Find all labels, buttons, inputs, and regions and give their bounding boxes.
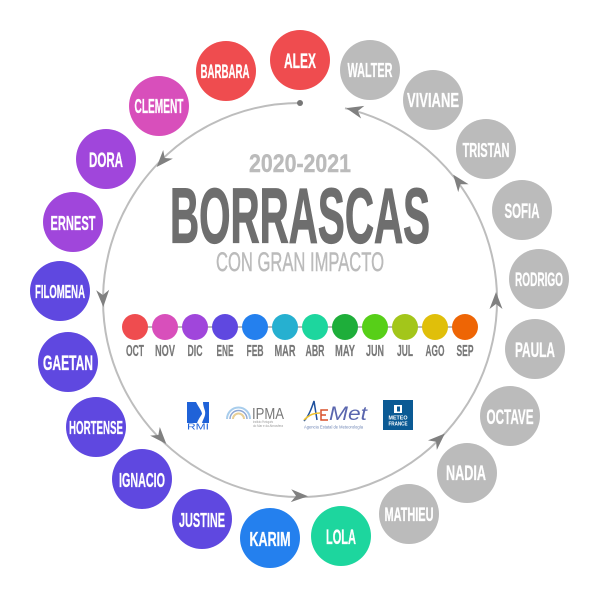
bubble: Rodrigo — [509, 249, 569, 309]
month: March — [272, 314, 298, 360]
bubble: Lola: LOLA — [326, 526, 356, 549]
month: September — [452, 314, 478, 360]
bubble: Alex: ALEX — [284, 50, 316, 73]
bubble: Alex — [270, 30, 330, 90]
bubble: Ignacio — [112, 449, 172, 509]
month: December — [182, 314, 208, 360]
logo: Meteo France: FRANCE — [388, 422, 408, 428]
logo: AEMet — [304, 401, 368, 430]
month: July: JUL — [397, 343, 413, 360]
logo: IPMA: Instituto Português — [253, 420, 273, 424]
bubble: Walter — [340, 40, 400, 100]
title block — [170, 150, 430, 277]
bubble: Walter: WALTER — [348, 60, 393, 82]
bubble: Sofia — [492, 180, 552, 240]
bubble: Gaetan — [38, 332, 98, 392]
ring with arrows — [96, 100, 502, 503]
bubble: Ernest — [43, 192, 103, 252]
logo: RMI — [187, 402, 209, 432]
logos — [187, 400, 413, 432]
month: August: AGO — [426, 343, 444, 360]
month: July — [392, 314, 418, 360]
month: August — [422, 314, 448, 360]
month: October: OCT — [126, 343, 144, 360]
bubble: Justine: JUSTINE — [179, 510, 225, 532]
bubble: Nadia — [437, 443, 497, 503]
bubble: Justine — [172, 489, 232, 549]
bubble: Barbara: BARBARA — [200, 62, 250, 83]
month: April — [302, 314, 328, 360]
bubble: Barbara — [196, 41, 256, 101]
month: February — [242, 314, 268, 360]
bubble: Hortense — [66, 397, 126, 457]
bubble: Dora: DORA — [89, 149, 123, 172]
bubble: Octave — [480, 386, 540, 446]
logo: IPMA: do Mar e da Atmosfera — [253, 424, 283, 428]
month: January — [212, 314, 238, 360]
bubble: Paula: PAULA — [515, 339, 555, 362]
month: September: SEP — [456, 343, 474, 360]
bubble: Clement — [129, 76, 189, 136]
bubble: Paula — [505, 319, 565, 379]
logo: AEMet: Met — [329, 404, 368, 425]
bubble: Hortense: HORTENSE — [69, 417, 123, 438]
bubble: Filomena: FILOMENA — [35, 281, 85, 302]
bubble: Nadia: NADIA — [446, 462, 486, 485]
bubble: Lola — [311, 506, 371, 566]
month: May — [332, 314, 358, 360]
month: June — [362, 314, 388, 360]
bubble: Clement: CLEMENT — [134, 96, 184, 118]
month: April: ABR — [306, 343, 325, 360]
month: May: MAY — [335, 343, 355, 360]
years heading: 2020-2021 — [249, 150, 351, 178]
month: March: MAR — [274, 343, 296, 360]
month: June: JUN — [366, 343, 384, 360]
month: December: DIC — [188, 343, 203, 360]
logo: IPMA — [227, 406, 284, 428]
bubble: Karim: KARIM — [250, 529, 290, 551]
logo: Meteo France — [383, 400, 413, 430]
bubble: Sofia: SOFIA — [504, 200, 540, 223]
bubble: Karim — [240, 508, 300, 568]
logo: AEMet: Agencia Estatal de Meteorología — [304, 424, 363, 430]
month: November: NOV — [155, 343, 175, 360]
logo: IPMA: IPMA — [252, 406, 284, 423]
bubble: Octave: OCTAVE — [486, 406, 534, 429]
bubble: Ignacio: IGNACIO — [119, 470, 165, 492]
bubble: Mathieu — [379, 484, 439, 544]
subtitle: CON GRAN IMPACTO — [216, 247, 384, 277]
bubble: Filomena — [30, 261, 90, 321]
month: October — [122, 314, 148, 360]
bubble: Dora — [76, 129, 136, 189]
bubble: Viviane — [403, 70, 463, 130]
month: January: ENE — [216, 343, 234, 360]
bubble: Viviane: VIVIANE — [407, 90, 459, 112]
bubble: Tristan: TRISTAN — [462, 140, 510, 162]
bubble: Mathieu: MATHIEU — [384, 505, 434, 526]
logo: RMI: RMI — [187, 422, 209, 432]
bubble: Tristan — [456, 119, 516, 179]
bubble: Gaetan: GAETAN — [43, 352, 93, 375]
month timeline — [122, 314, 478, 360]
bubble: Ernest: ERNEST — [50, 213, 96, 235]
logo: Meteo France: METEO — [388, 416, 408, 422]
month: November — [152, 314, 178, 360]
month: February: FEB — [246, 343, 264, 360]
